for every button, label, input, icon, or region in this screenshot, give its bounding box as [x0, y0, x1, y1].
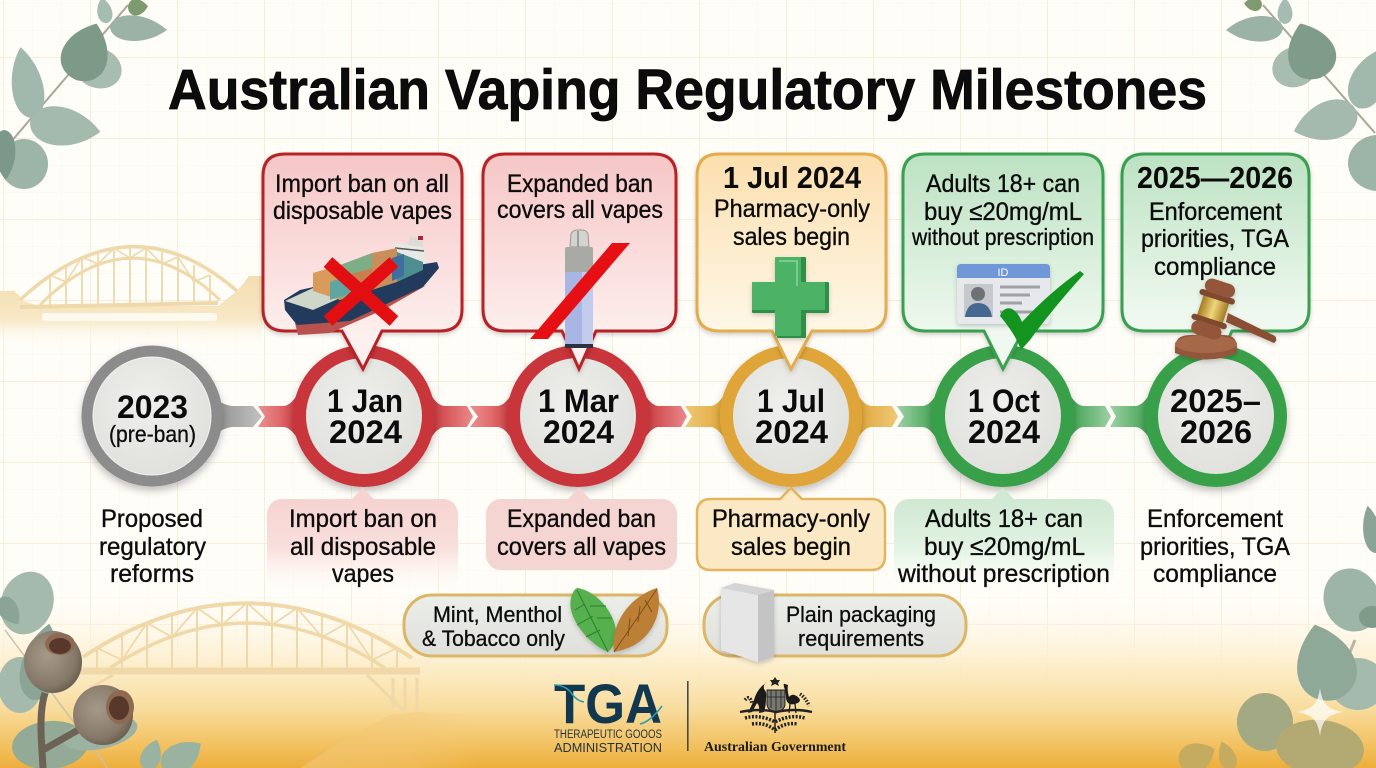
callout: enforcement: compliance: [1154, 253, 1276, 281]
logo text: Australian Government: Australian Government: [704, 740, 846, 755]
callout: adults 18+: Adults 18+ can: [926, 170, 1080, 198]
callout: expanded ban: [483, 154, 676, 369]
timeline node: 1 Jul 2024: 2024: [755, 414, 828, 450]
callout: import ban: Import ban on all: [275, 170, 449, 198]
bridge: upper left skyline: [0, 247, 262, 346]
red cross: [328, 262, 394, 321]
logo: TGA: THERAPEUTIC GOOOS: [554, 729, 662, 741]
gumnut stems: [41, 693, 78, 768]
label: import ban: vapes: [332, 560, 394, 588]
timeline node: 1 Oct 2024: 1 Oct: [968, 383, 1040, 419]
sparkle watermark: [1296, 688, 1344, 736]
callout: pharmacy-only: Pharmacy-only: [714, 195, 870, 223]
icon: ID card: ID: [998, 267, 1009, 279]
icon: vape crossed out: [530, 230, 630, 348]
logo: Australian Government coat of arms: [740, 677, 812, 733]
timeline node: 1 Mar 2024: 1 Mar: [538, 383, 619, 419]
callout: adults 18+: without prescription: [911, 224, 1094, 250]
callout: pharmacy-only: 1 Jul 2024: [723, 160, 862, 195]
label: proposed reforms: Proposed: [101, 505, 203, 533]
label: pharmacy-only: [697, 488, 885, 570]
timeline node: 1 Jul 2024: [685, 345, 898, 487]
label: proposed reforms: [99, 505, 206, 588]
icon: container ship crossed out: [284, 236, 439, 335]
icon: plain box: [721, 583, 774, 662]
label: enforcement: [1140, 505, 1290, 588]
icon: mint leaf: [570, 588, 616, 652]
label: adults 18+: Adults 18+ can: [925, 505, 1083, 533]
label: import ban: all disposable: [290, 533, 436, 561]
pill: flavours: Mint, Menthol: [433, 602, 562, 627]
callout: enforcement: 2025—2026: [1137, 160, 1293, 195]
timeline node: 2023 pre-ban: [82, 346, 262, 486]
icon: gavel: [1175, 276, 1276, 360]
eucalyptus and gumnuts: bottom left: [0, 564, 209, 768]
pill: flavours: & Tobacco only: [422, 626, 566, 651]
callout: enforcement: priorities, TGA: [1141, 225, 1289, 253]
gumnut two: [73, 685, 134, 745]
gumnut one: [24, 631, 82, 693]
callout: enforcement: [1122, 154, 1309, 360]
icon: green check mark: [1000, 271, 1084, 350]
icon: green pharmacy cross: [753, 258, 828, 337]
timeline node: 1 Oct 2024: 2024: [968, 414, 1040, 450]
logo: TGA: ADMINISTRATION: [554, 740, 662, 755]
timeline node: 1 Jan 2024: [258, 345, 473, 487]
callout: enforcement: Enforcement: [1149, 198, 1282, 226]
pill: plain packaging: Plain packaging: [786, 602, 936, 627]
icon: tobacco leaf: [613, 588, 659, 652]
timeline node: 2023 pre-ban: 2023: [117, 389, 188, 425]
timeline node: 1 Jan 2024: 1 Jan: [327, 383, 403, 419]
label: pharmacy-only: Pharmacy-only: [712, 505, 870, 533]
logo: TGA: TGA: [554, 672, 662, 735]
label: proposed reforms: regulatory: [99, 533, 206, 561]
callout: pharmacy-only: sales begin: [733, 223, 850, 251]
bridge: lower left: [80, 603, 480, 768]
timeline node: 1 Mar 2024: 2024: [543, 414, 614, 450]
label: import ban: [267, 488, 458, 591]
timeline node: 1 Jul 2024: 1 Jul: [757, 383, 825, 419]
logo divider: [687, 681, 689, 751]
label: expanded ban: covers all vapes: [497, 533, 666, 561]
label: adults 18+: without prescription: [897, 560, 1110, 588]
timeline node: 2025-2026: 2026: [1180, 414, 1252, 450]
label: adults 18+: [894, 488, 1114, 591]
timeline node: 2023 pre-ban: (pre-ban): [109, 421, 196, 447]
timeline node: 1 Mar 2024: [470, 345, 687, 487]
label: expanded ban: [486, 488, 677, 570]
label: enforcement: priorities, TGA: [1140, 533, 1290, 561]
label: proposed reforms: reforms: [110, 560, 194, 588]
callout: expanded ban: covers all vapes: [497, 196, 663, 224]
eucalyptus: bottom right: [1174, 504, 1376, 768]
callout: pharmacy-only: [697, 154, 886, 369]
eucalyptus: top right: [1226, 0, 1376, 191]
label: adults 18+: buy ≤20mg/mL: [924, 533, 1085, 561]
label: pharmacy-only: sales begin: [731, 533, 851, 561]
pill: plain packaging: [704, 583, 966, 662]
label: import ban: Import ban on: [289, 505, 437, 533]
icon: ID card: [957, 264, 1050, 324]
callout: import ban: [263, 154, 462, 369]
pill: flavours: [404, 588, 667, 656]
timeline node: 1 Jan 2024: 2024: [329, 414, 402, 450]
pill: plain packaging: requirements: [798, 626, 924, 651]
timeline node: 2025-2026: 2025–: [1170, 383, 1261, 419]
timeline node: 1 Oct 2024: [897, 345, 1111, 487]
callout: adults 18+: [903, 154, 1103, 369]
label: enforcement: compliance: [1153, 560, 1277, 588]
title: Australian Vaping Regulatory Milestones: [168, 58, 1207, 122]
callout: adults 18+: buy ≤20mg/mL: [924, 198, 1082, 226]
callout: import ban: disposable vapes: [273, 197, 452, 225]
timeline node: 2025-2026: [1110, 345, 1287, 487]
label: expanded ban: Expanded ban: [507, 505, 656, 533]
callout: expanded ban: Expanded ban: [507, 170, 653, 198]
eucalyptus: top left: [0, 0, 168, 189]
label: enforcement: Enforcement: [1147, 505, 1283, 533]
